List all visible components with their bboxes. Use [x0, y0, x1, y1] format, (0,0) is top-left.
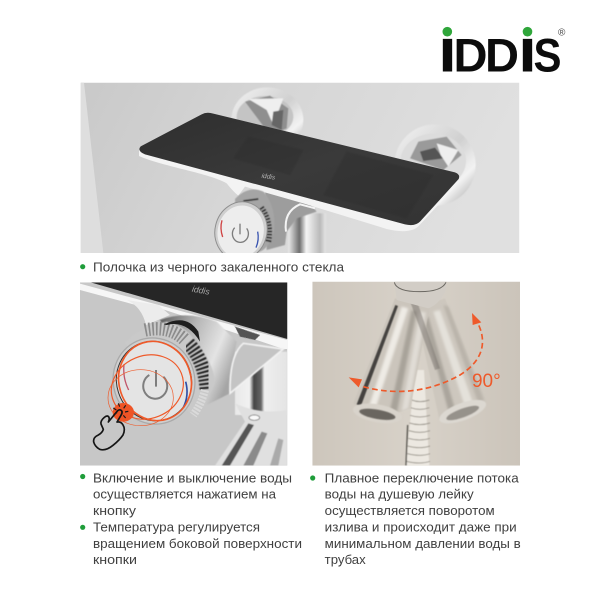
logo wordmark: S — [534, 28, 562, 81]
tap point — [113, 403, 134, 422]
shelf brand mark: iddis — [191, 284, 211, 297]
stem pipe — [235, 352, 287, 415]
shelf chrome edge — [139, 150, 461, 231]
text: flow switch: излива и происходит даже при — [325, 520, 517, 534]
rotation arrow — [349, 313, 482, 391]
text: flow switch: минимальном давлении воды в — [325, 536, 521, 551]
panel: spout rotation photo — [312, 282, 520, 466]
panel: glass shelf photo — [81, 83, 519, 266]
bracket — [230, 327, 283, 393]
text: temperature: вращением боковой поверхности — [93, 536, 302, 551]
text: flow switch: Плавное переключение потока — [325, 470, 519, 485]
top collar — [394, 282, 447, 308]
logo: IDDIS — [438, 27, 566, 81]
body highlight — [286, 204, 315, 232]
wall corner wedge — [81, 83, 103, 253]
lower pipe — [288, 213, 326, 255]
left spout — [351, 298, 430, 426]
white corner behind knob — [127, 300, 170, 325]
hose — [406, 370, 430, 466]
cold indicator — [183, 382, 187, 408]
wall background — [80, 282, 287, 466]
right ghost spout — [415, 298, 489, 428]
logo wordmark: D — [454, 28, 488, 81]
knob face — [112, 337, 196, 425]
logo wordmark: I — [438, 28, 456, 81]
panel: button and rotation photo — [80, 282, 287, 466]
icon: hand — [94, 403, 128, 450]
power icon — [143, 370, 167, 399]
black shelf — [91, 282, 287, 339]
logo wordmark: I — [518, 28, 536, 81]
logo dot: first i — [442, 27, 452, 36]
power icon — [232, 224, 248, 242]
feature list: left column — [80, 470, 302, 567]
text: on/off: Включение и выключение воды — [93, 470, 292, 485]
left wall mount — [232, 88, 304, 134]
knurled ring — [144, 321, 214, 417]
shelf brand mark: iddis — [261, 173, 276, 182]
hot indicator — [124, 364, 129, 390]
registered mark: ® — [558, 28, 566, 38]
dark recess — [164, 320, 200, 342]
bullet: temperature — [80, 525, 85, 530]
right wall mount — [394, 124, 476, 206]
hot indicator — [221, 220, 223, 237]
angle label: 90° — [472, 371, 501, 392]
bullet: flow switch — [310, 475, 315, 481]
centre shadow — [408, 297, 440, 370]
text: temperature: Температура регулируется — [93, 520, 260, 534]
wall background — [81, 83, 519, 253]
text: on/off: осуществляется нажатием на — [93, 487, 277, 502]
logo dot: second i — [523, 27, 532, 36]
logo wordmark — [438, 28, 562, 81]
text: flow switch: воды на душевую лейку — [325, 487, 474, 502]
collar rim — [394, 282, 446, 292]
wall background — [312, 282, 520, 466]
text: temperature: кнопки — [93, 552, 137, 567]
bullet: on/off — [80, 474, 85, 479]
rotation rings — [108, 340, 192, 426]
logo wordmark: D — [485, 28, 519, 81]
cold indicator — [256, 232, 258, 248]
shelf reflections — [233, 137, 433, 218]
text: flow switch: трубах — [325, 552, 366, 567]
black glass shelf — [139, 113, 459, 225]
text: on/off: кнопку — [93, 503, 137, 518]
caption: shelf: Полочка из черного закаленного стекла — [93, 260, 345, 274]
feature list: right column — [310, 470, 521, 567]
tap sparks — [113, 403, 128, 418]
mixer body — [265, 190, 317, 250]
knob face — [214, 201, 268, 253]
collar and lower spout — [215, 403, 287, 466]
knob cylinder — [160, 315, 237, 407]
bullet: shelf — [80, 264, 85, 269]
white shelf edge — [80, 284, 287, 349]
text: flow switch: осуществляется поворотом — [325, 503, 495, 518]
knob knurled side — [235, 190, 274, 253]
